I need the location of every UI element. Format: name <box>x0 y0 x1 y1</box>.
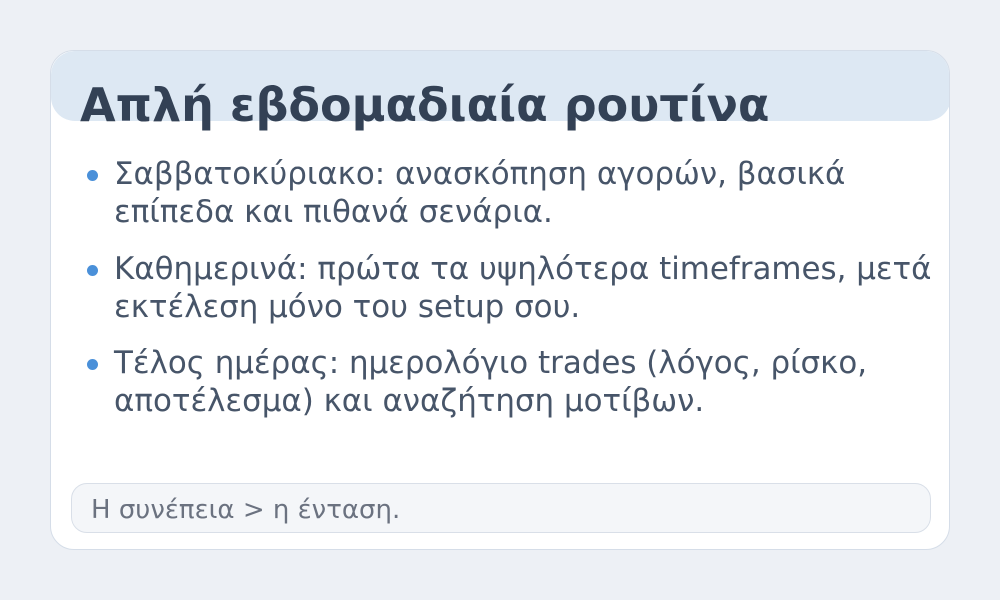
bullet: weekend <box>87 156 845 230</box>
bullet: weekdays: εκτέλεση μόνο του setup σου. <box>114 289 580 325</box>
bullet: end of day: Τέλος ημέρας: ημερολόγιο trades (λόγος, ρίσκο, <box>114 345 867 381</box>
bullet: end of day: αποτέλεσμα) και αναζήτηση μοτίβων. <box>114 383 704 419</box>
footer callout <box>71 483 931 533</box>
bullet list <box>87 156 932 419</box>
bullet: weekdays: Καθημερινά: πρώτα τα υψηλότερα timeframes, μετά <box>114 251 932 287</box>
bullet: weekend: Σαββατοκύριακο: ανασκόπηση αγορών, βασικά <box>114 156 845 192</box>
title: Απλή εβδομαδιαία ρουτίνα <box>80 78 770 132</box>
bullet: weekdays <box>87 251 932 325</box>
footer callout: Η συνέπεια > η ένταση. <box>91 495 400 525</box>
bullet: weekend: επίπεδα και πιθανά σενάρια. <box>114 194 553 230</box>
bullet: end of day <box>87 345 867 419</box>
header band <box>51 51 951 121</box>
panel: card <box>50 50 950 550</box>
